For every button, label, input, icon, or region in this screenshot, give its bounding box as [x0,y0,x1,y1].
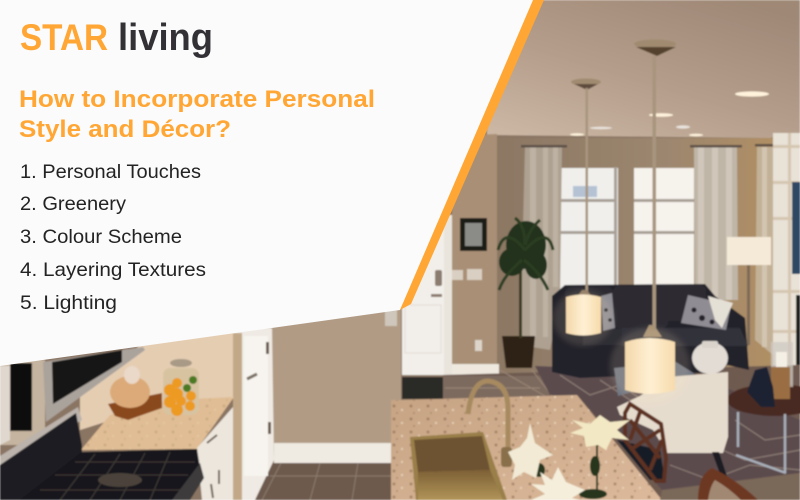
white title panel [0,0,535,366]
white vase [692,342,728,374]
logo: STAR living: STAR [20,17,108,58]
granite island counter [391,395,662,500]
doormat [402,377,447,399]
right wall tile panels [773,133,800,373]
dining chair backs [617,404,800,500]
windows [558,167,694,293]
faucet [468,381,508,453]
front door and frame [402,225,444,375]
white armchair [617,372,728,476]
basket of snacks [108,366,162,420]
left wall column [452,134,497,365]
pendant lamp: far [553,78,613,346]
ceiling [480,0,800,138]
orange diagonal accent [400,0,544,310]
floor tiles [443,365,800,500]
pendant lamp: near [610,40,690,404]
jar of citrus fruit [163,359,199,416]
heading: How to Incorporate Personal [19,86,375,113]
white flowers and stem [508,415,630,500]
coffee table [614,362,695,396]
pantry door [233,328,274,500]
wall switches and skirting [452,270,463,280]
plant and basket [498,218,553,368]
sofa [552,284,749,378]
framed art [460,218,487,251]
numbered list [20,161,206,314]
kitchen wall, skirting and floor [272,300,401,400]
side table and ornaments [727,342,800,473]
logo: STAR living [20,17,213,59]
logo: STAR living: living [118,17,213,59]
heading: Style and Décor? [19,116,231,143]
sink [410,432,507,500]
back wall [497,138,777,378]
numbered list: 2. Greenery [20,193,126,215]
curtain rods [521,144,775,148]
kitchen cabinets [197,407,233,500]
microwave [0,347,145,445]
backsplash [80,328,233,430]
recessed ceiling lights [570,91,769,136]
kitchen countertop [81,397,234,450]
numbered list: 3. Colour Scheme [20,226,182,248]
floor lamp [727,237,771,345]
curtains [520,146,774,355]
numbered list: 1. Personal Touches [20,161,201,183]
gas stove [0,407,204,500]
numbered list: 5. Lighting [20,292,117,314]
heading [19,86,375,143]
numbered list: 4. Layering Textures [20,259,206,281]
rug [535,366,800,490]
throw cushions [601,293,733,331]
